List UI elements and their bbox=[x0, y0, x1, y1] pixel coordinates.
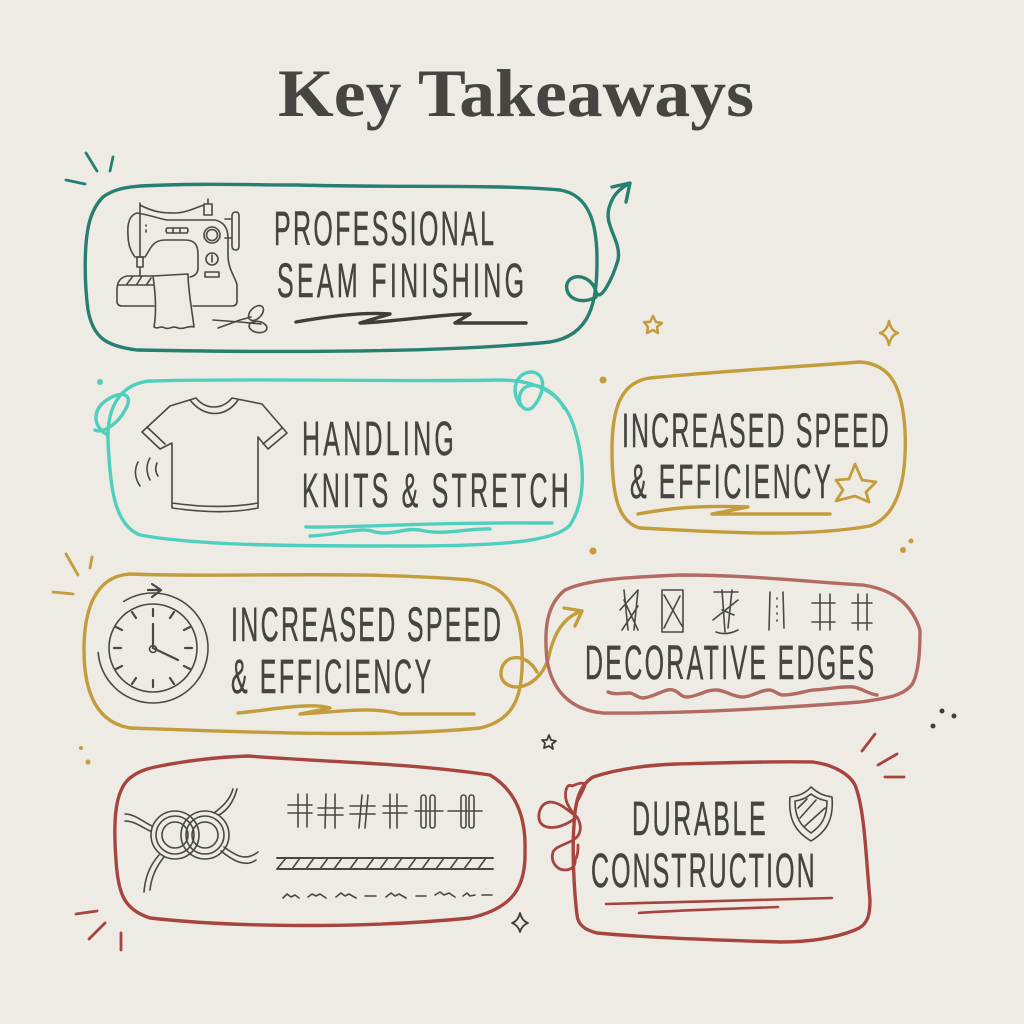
text: handling knits and stretch: HANDLING bbox=[302, 412, 454, 466]
title: Key Takeaways bbox=[278, 55, 754, 131]
underline scribble bbox=[296, 313, 526, 323]
text bbox=[622, 404, 889, 509]
icon: knot bbox=[125, 789, 258, 892]
card outline bbox=[115, 756, 525, 926]
sparks bbox=[76, 911, 121, 950]
icon: sewing machine bbox=[117, 199, 268, 334]
panel: increased speed top right bbox=[612, 362, 905, 533]
card outline bbox=[84, 574, 522, 733]
loops bbox=[95, 372, 564, 434]
arrow: loop to top right bbox=[567, 183, 630, 301]
icon: star bbox=[836, 464, 876, 502]
panel: increased speed clock bbox=[53, 554, 582, 733]
underline scribble bbox=[306, 523, 552, 536]
text: professional seam finishing: PROFESSIONAL bbox=[274, 202, 494, 256]
card outline bbox=[573, 762, 870, 942]
underline scribble bbox=[606, 898, 832, 913]
card outline bbox=[612, 362, 905, 533]
text bbox=[591, 792, 815, 898]
text: professional seam finishing bbox=[274, 202, 524, 308]
icon: shield bbox=[790, 787, 832, 841]
decorative stars and dots bbox=[79, 316, 956, 932]
icon: stitch rows bbox=[277, 794, 493, 898]
loop arrow bbox=[501, 608, 582, 687]
text bbox=[231, 598, 501, 704]
card outline bbox=[108, 380, 582, 546]
icon: sparks bbox=[66, 153, 113, 184]
text: CONSTRUCTION bbox=[591, 844, 815, 898]
text: handling knits and stretch: KNITS & STRETCH bbox=[302, 464, 569, 518]
text: & EFFICIENCY bbox=[630, 455, 831, 509]
panel: decorative edges bbox=[546, 575, 920, 713]
loop knot bbox=[539, 783, 585, 870]
card outline bbox=[85, 184, 597, 351]
panel: knots and stitches bbox=[76, 756, 525, 950]
panel: professional seam finishing bbox=[66, 153, 630, 351]
icon: t-shirt bbox=[135, 398, 287, 512]
panel: durable construction bbox=[539, 762, 870, 942]
panel: handling knits and stretch bbox=[95, 372, 582, 546]
underline scribble bbox=[608, 687, 877, 698]
underline scribble bbox=[238, 706, 474, 714]
text: DECORATIVE EDGES bbox=[585, 636, 874, 690]
icon: clock bbox=[86, 581, 220, 715]
sparks bbox=[53, 554, 92, 594]
text: INCREASED SPEED bbox=[231, 598, 501, 652]
text: handling knits and stretch bbox=[302, 412, 569, 518]
icon: stitch samples bbox=[620, 590, 872, 634]
card outline bbox=[546, 575, 920, 713]
underline scribble bbox=[638, 506, 830, 514]
text: professional seam finishing: SEAM FINISHING bbox=[277, 254, 524, 308]
text: INCREASED SPEED bbox=[622, 404, 889, 458]
text: & EFFICIENCY bbox=[231, 650, 431, 704]
text: DURABLE bbox=[632, 792, 766, 846]
